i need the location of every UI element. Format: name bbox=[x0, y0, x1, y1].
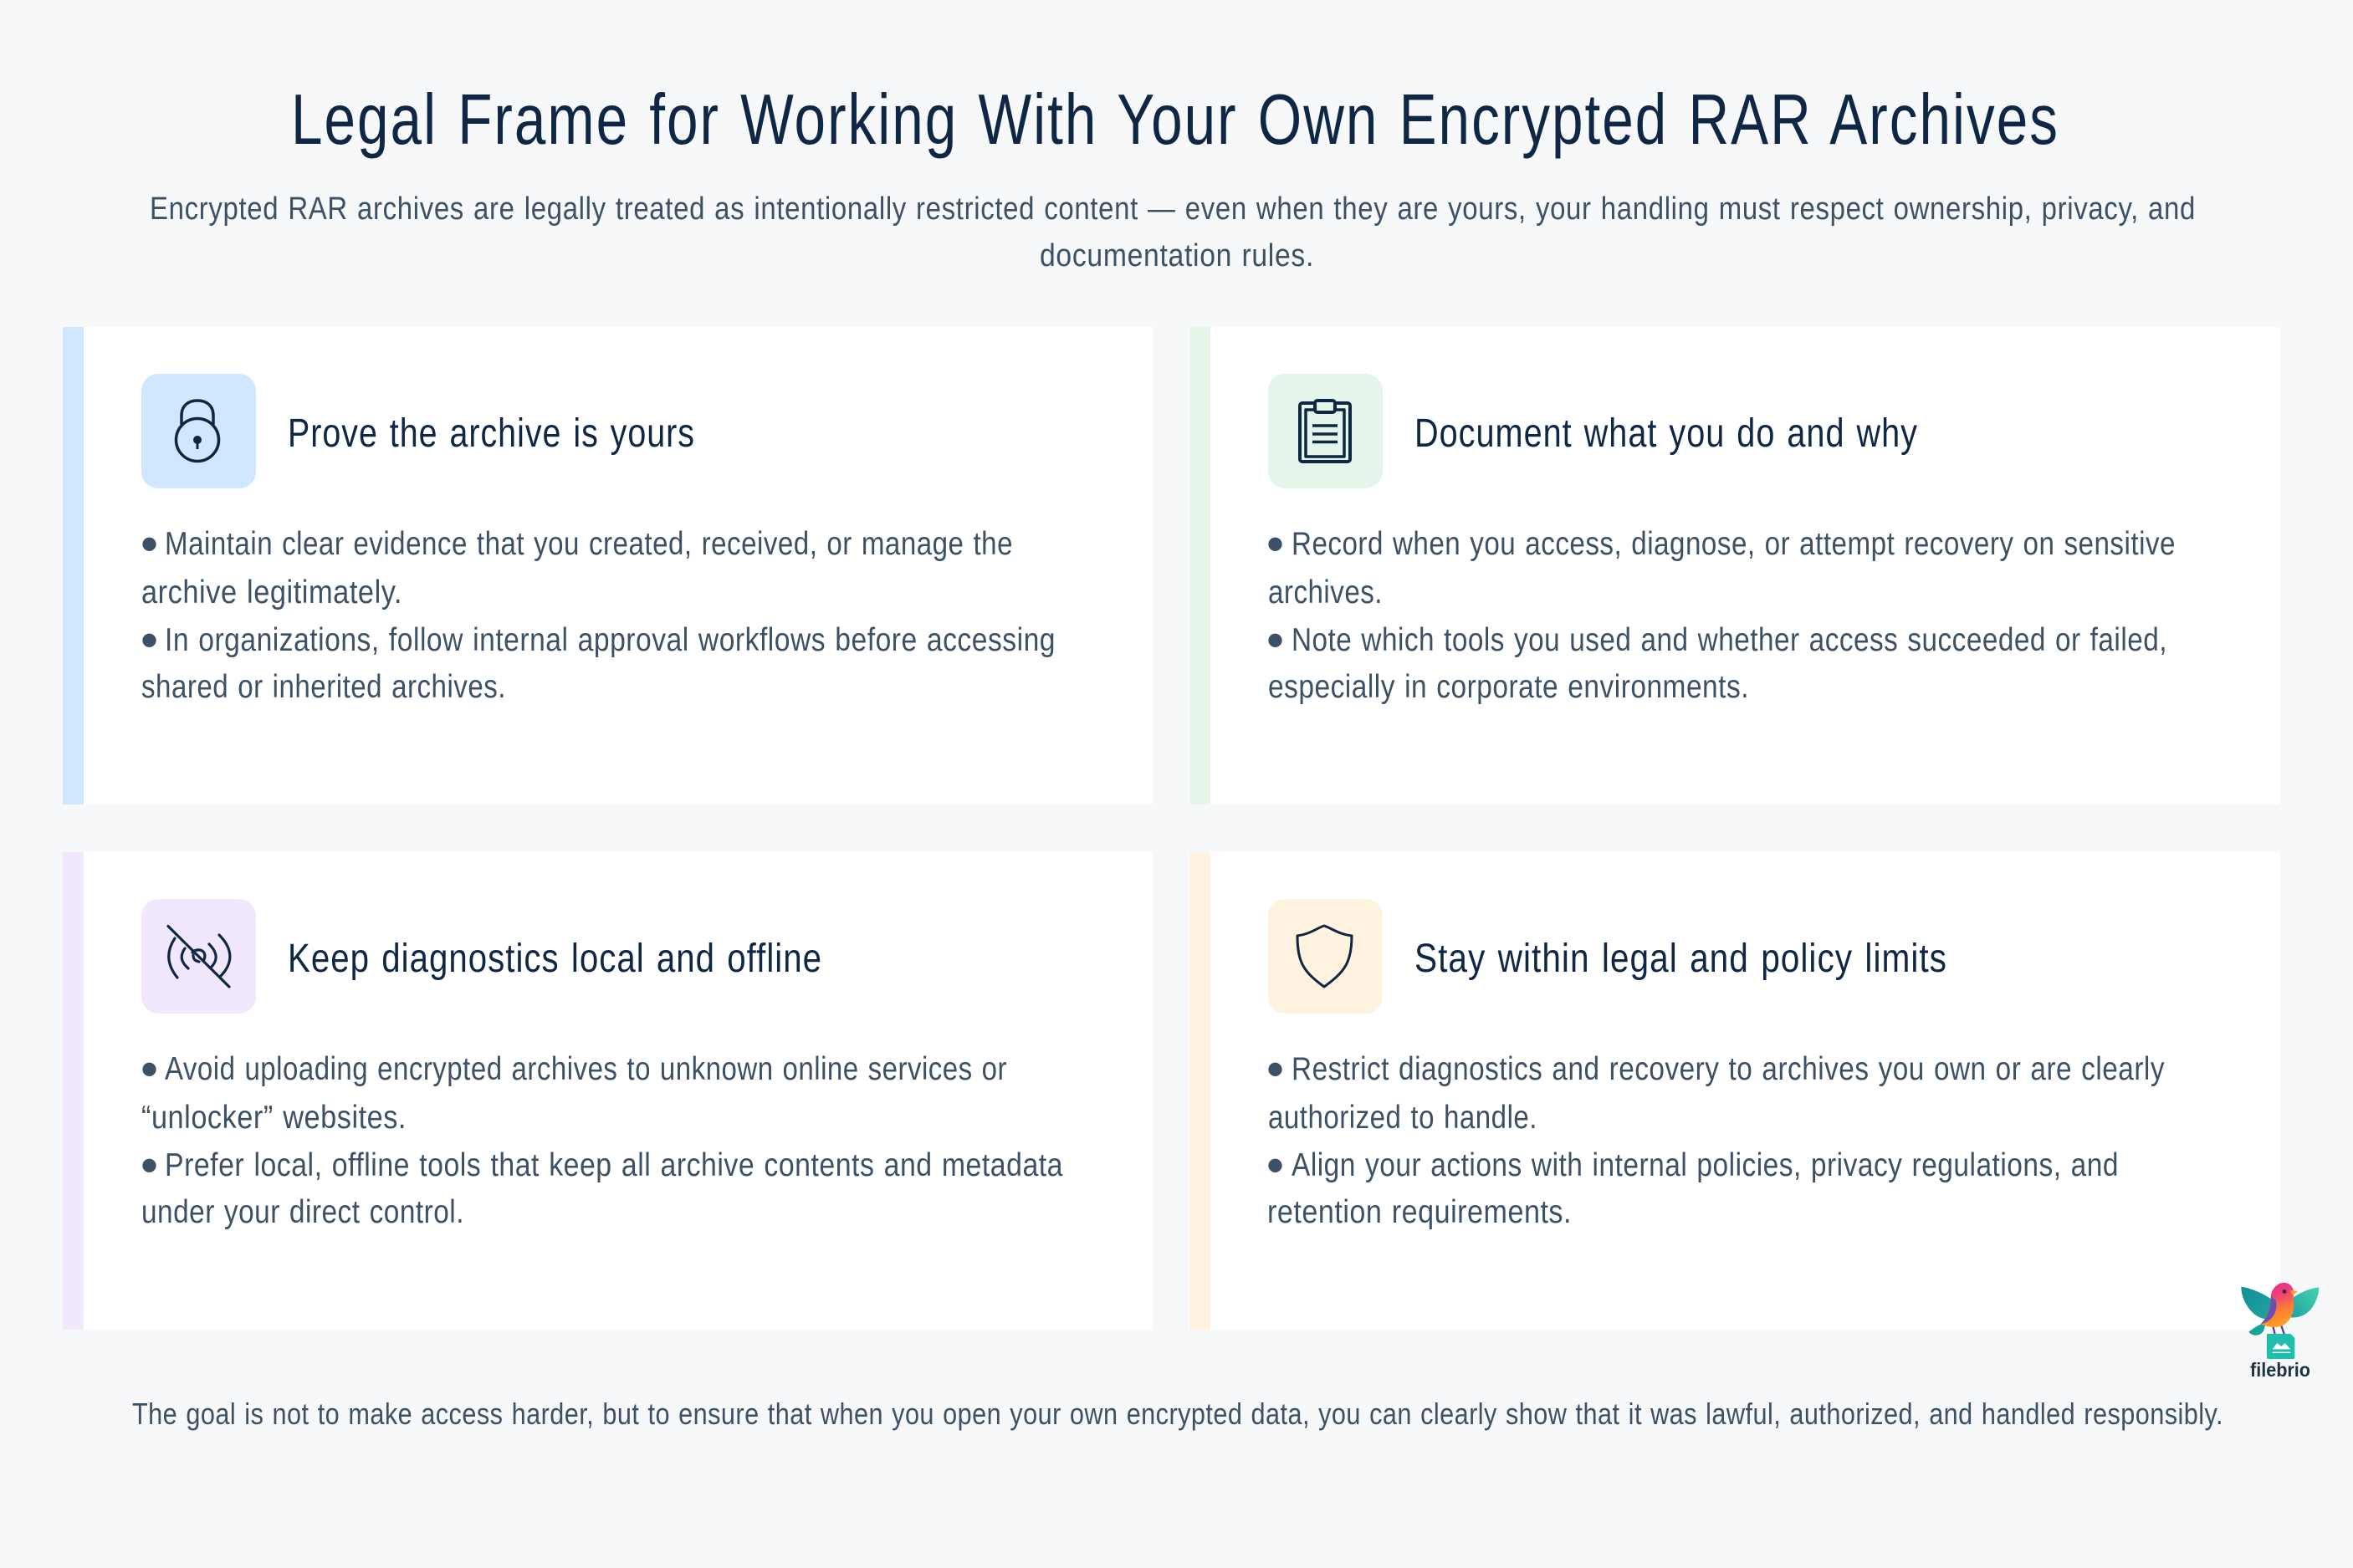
bullet text: archives. bbox=[1268, 575, 1383, 610]
icon: clipboard bbox=[1268, 374, 1383, 488]
panel: stay within legal and policy limits bbox=[1189, 852, 2279, 1330]
bullet text: “unlocker” websites. bbox=[141, 1100, 407, 1136]
bullet text: retention requirements. bbox=[1267, 1194, 1572, 1230]
bullet text: Note which tools you used and whether access succeeded or failed, bbox=[1292, 622, 2167, 658]
subtitle: documentation rules. bbox=[1040, 238, 1314, 273]
heading: Stay within legal and policy limits bbox=[1414, 937, 1947, 981]
bullet text: Record when you access, diagnose, or attempt recovery on sensitive bbox=[1292, 526, 2176, 562]
bullet text: • bbox=[1266, 612, 1284, 668]
bullet text: • bbox=[141, 1137, 158, 1193]
icon: padlock bbox=[141, 374, 256, 488]
panel: keep diagnostics local and offline bbox=[63, 852, 1153, 1330]
bullet text: Align your actions with internal policies, privacy regulations, and bbox=[1292, 1147, 2119, 1183]
bullet text: shared or inherited archives. bbox=[141, 669, 506, 705]
bullet text: Avoid uploading encrypted archives to unknown online services or bbox=[165, 1051, 1007, 1087]
heading: Keep diagnostics local and offline bbox=[288, 937, 822, 981]
bullet text: In organizations, follow internal approval workflows before accessing bbox=[165, 622, 1056, 658]
bullet text bbox=[1266, 1041, 2165, 1230]
bullet text: • bbox=[141, 1041, 158, 1097]
bullet text bbox=[141, 1041, 1063, 1230]
heading: Document what you do and why bbox=[1414, 411, 1918, 456]
bullet text bbox=[141, 516, 1056, 705]
bullet text: archive legitimately. bbox=[141, 575, 402, 610]
bullet text: • bbox=[141, 516, 158, 572]
bullet text: • bbox=[1266, 1137, 1284, 1193]
bullet text: authorized to handle. bbox=[1268, 1100, 1537, 1136]
heading: Prove the archive is yours bbox=[288, 411, 695, 456]
subtitle bbox=[150, 192, 2196, 273]
bullet text bbox=[1266, 516, 2176, 705]
bullet text: Prefer local, offline tools that keep all archive contents and metadata bbox=[165, 1147, 1063, 1183]
bullet text: especially in corporate environments. bbox=[1268, 669, 1749, 705]
bullet text: • bbox=[1266, 1041, 1284, 1097]
bullet text: • bbox=[1266, 516, 1284, 572]
panel: document what you do and why bbox=[1189, 327, 2279, 804]
panel: prove the archive is yours bbox=[63, 327, 1153, 804]
logo: filebrio bird bbox=[2241, 1283, 2319, 1381]
bullet text: under your direct control. bbox=[141, 1194, 464, 1230]
bullet text: Maintain clear evidence that you created, received, or manage the bbox=[165, 526, 1013, 562]
icon: crossed-out signal bbox=[141, 899, 256, 1014]
bullet text: Restrict diagnostics and recovery to archives you own or are clearly bbox=[1292, 1051, 2165, 1087]
logo: filebrio bird: filebrio bbox=[2250, 1359, 2310, 1381]
bullet text: • bbox=[141, 612, 158, 668]
icon: shield bbox=[1268, 899, 1383, 1014]
